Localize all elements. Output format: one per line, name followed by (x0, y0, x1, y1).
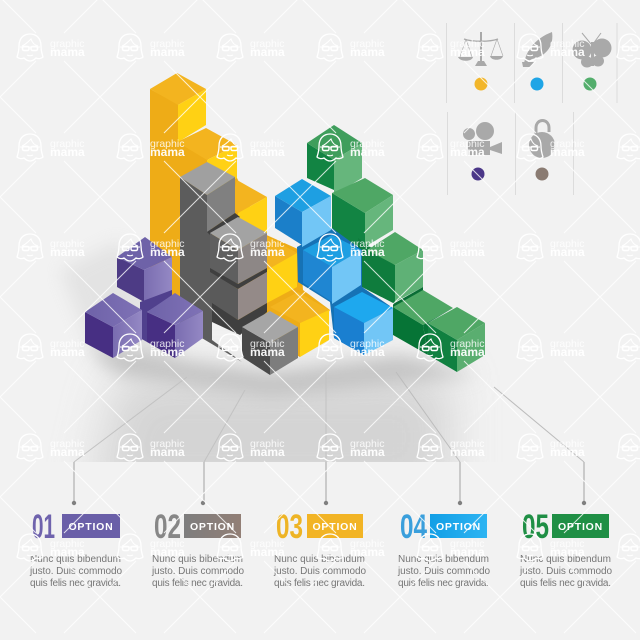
dot: blue (530, 78, 544, 90)
option 05 (519, 508, 612, 589)
connector 02 (201, 390, 245, 505)
watermark: mama (150, 145, 185, 159)
text 01: justo. Duis commodo (29, 566, 122, 577)
watermark: mama (450, 145, 485, 159)
green front cubes (393, 290, 485, 372)
icon: open lock (529, 120, 555, 158)
number 05: 05 (522, 508, 549, 546)
connector lines (72, 372, 586, 505)
watermark: graphic (50, 38, 84, 50)
watermark: graphic (350, 538, 384, 550)
watermark: mama (50, 145, 85, 159)
watermark: mama (450, 245, 485, 259)
text 01: quis felis nec gravida. (30, 578, 121, 589)
watermark: mama (250, 545, 285, 559)
icon: butterfly (572, 33, 612, 68)
watermark: graphic (350, 438, 384, 450)
watermark: mama (550, 145, 585, 159)
watermark: graphic (350, 238, 384, 250)
number 03: 03 (276, 508, 303, 546)
watermark: graphic (50, 538, 84, 550)
text 02: Nunc quis bibendum (152, 554, 243, 565)
watermark: mama (450, 445, 485, 459)
badge 05: OPTION (558, 521, 603, 533)
watermark: mama (450, 345, 485, 359)
watermark: mama (250, 445, 285, 459)
text 02: justo. Duis commodo (151, 566, 244, 577)
watermark: mama (150, 245, 185, 259)
dot: yellow (474, 78, 488, 90)
green stack back (307, 125, 423, 309)
blue bars (275, 179, 393, 355)
watermark: mama (50, 545, 85, 559)
grey bars (180, 162, 267, 362)
icon: quill (522, 32, 552, 67)
icon: scales (458, 32, 503, 66)
watermark: mama (350, 245, 385, 259)
connector 03 (324, 372, 328, 505)
text 01: Nunc quis bibendum (30, 554, 121, 565)
watermark: graphic (550, 238, 584, 250)
watermark: graphic (50, 338, 84, 350)
watermark: mama (450, 545, 485, 559)
text 05 (519, 554, 612, 589)
watermark: graphic (150, 438, 184, 450)
watermark: graphic (550, 338, 584, 350)
watermark: graphic (150, 38, 184, 50)
watermark: mama (150, 345, 185, 359)
text 03 (273, 554, 366, 589)
watermark: mama (150, 45, 185, 59)
watermark: graphic (350, 38, 384, 50)
watermark: graphic (450, 138, 484, 150)
watermark: graphic (250, 538, 284, 550)
dot: brown (536, 168, 548, 180)
text 04: Nunc quis bibendum (398, 554, 489, 565)
watermark: graphic (150, 138, 184, 150)
watermark: mama (150, 545, 185, 559)
watermark: graphic (150, 538, 184, 550)
text 04: justo. Duis commodo (397, 566, 490, 577)
option 02 (151, 508, 244, 589)
watermark: graphic (50, 238, 84, 250)
watermark: graphic (550, 38, 584, 50)
cube chart (85, 73, 485, 375)
watermark: mama (50, 245, 85, 259)
watermark: mama (250, 345, 285, 359)
text 01 (29, 554, 122, 589)
number 04: 04 (400, 508, 427, 546)
option 03 (273, 508, 366, 589)
purple cubes (85, 237, 203, 358)
yellow front cube (270, 292, 329, 357)
text 02: quis felis nec gravida. (152, 578, 243, 589)
watermark: mama (550, 445, 585, 459)
text 03: justo. Duis commodo (273, 566, 366, 577)
watermark: mama (350, 45, 385, 59)
watermark: graphic (150, 238, 184, 250)
text 05: justo. Duis commodo (519, 566, 612, 577)
watermark: graphic (450, 238, 484, 250)
dot: green (584, 78, 596, 90)
text 05: Nunc quis bibendum (520, 554, 611, 565)
watermark: graphic (250, 238, 284, 250)
watermark: mama (50, 45, 85, 59)
watermark: graphic (450, 438, 484, 450)
watermark: mama (250, 45, 285, 59)
option 01 (29, 508, 122, 589)
wall shadow (66, 246, 472, 462)
watermark: mama (350, 345, 385, 359)
icon panel (446, 23, 617, 195)
watermark: mama (150, 445, 185, 459)
watermark: mama (350, 445, 385, 459)
yellow bars (150, 73, 330, 357)
watermark: graphic (50, 438, 84, 450)
watermark: mama (250, 245, 285, 259)
text 05: quis felis nec gravida. (520, 578, 611, 589)
dot: purple (472, 168, 484, 180)
watermark: graphic (250, 138, 284, 150)
text 02 (151, 554, 244, 589)
watermark: mama (450, 45, 485, 59)
grey front cube (242, 311, 298, 375)
watermark: graphic (350, 138, 384, 150)
connector 01 (72, 377, 187, 505)
watermark: graphic (450, 538, 484, 550)
watermark: graphic (250, 438, 284, 450)
badge 03: OPTION (312, 521, 358, 533)
watermark: graphic (550, 138, 584, 150)
text 03: Nunc quis bibendum (274, 554, 365, 565)
blue front cube (334, 292, 393, 355)
number 01: 01 (32, 508, 55, 546)
connector 05 (494, 387, 586, 505)
watermark: mama (550, 245, 585, 259)
watermark: mama (550, 545, 585, 559)
watermark: graphic (450, 38, 484, 50)
watermark: graphic (50, 138, 84, 150)
badge 01: OPTION (68, 521, 114, 533)
watermark: mama (50, 445, 85, 459)
text 04 (397, 554, 490, 589)
watermark: mama (350, 145, 385, 159)
number 02: 02 (154, 508, 181, 546)
watermark: mama (250, 145, 285, 159)
watermark: mama (550, 345, 585, 359)
watermark: mama (550, 45, 585, 59)
badge 04: OPTION (436, 521, 481, 533)
text 03: quis felis nec gravida. (274, 578, 365, 589)
connector 04 (396, 372, 462, 505)
watermark: mama (350, 545, 385, 559)
watermark: graphic (250, 338, 284, 350)
watermark: graphic (150, 338, 184, 350)
text 04: quis felis nec gravida. (398, 578, 489, 589)
watermark: graphic (450, 338, 484, 350)
icon: film camera (463, 122, 502, 155)
option 04 (397, 508, 490, 589)
watermark: graphic (250, 38, 284, 50)
watermark: graphic (350, 338, 384, 350)
watermark: graphic (550, 538, 584, 550)
watermark: graphic (550, 438, 584, 450)
watermark: mama (50, 345, 85, 359)
badge 02: OPTION (190, 521, 235, 533)
